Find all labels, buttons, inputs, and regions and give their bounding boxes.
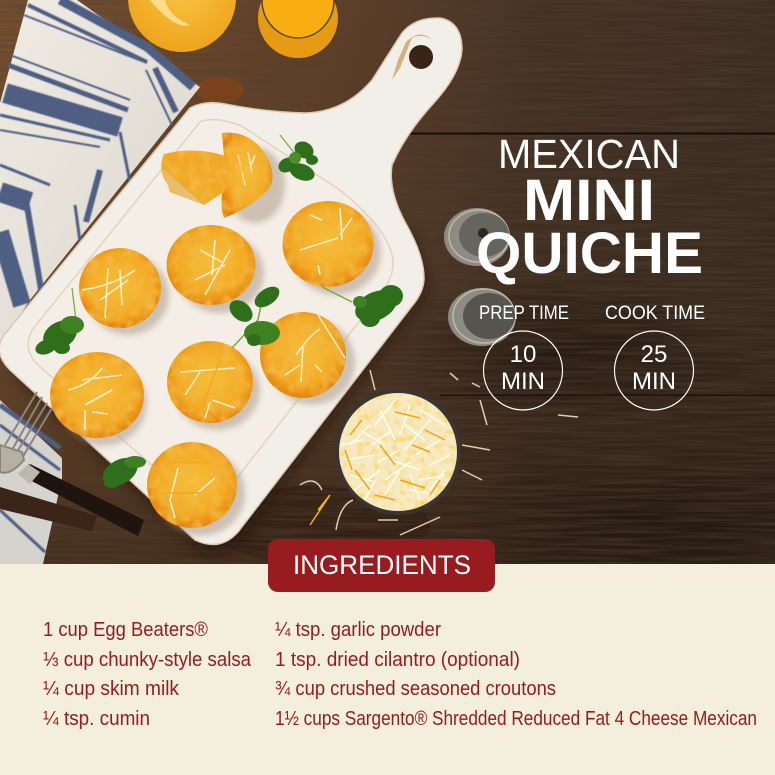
ingredients list: left column: 1 cup Egg Beaters® [43,619,208,641]
dark utensil handle [0,487,97,531]
ingredients list: left column [43,619,252,730]
ingredients panel [0,564,775,775]
title: Mexican Mini Quiche [476,131,703,286]
quiche shadows [59,147,381,536]
glass: right juice [258,0,338,58]
cook time circle [614,331,694,410]
cilantro sprig top [276,135,318,184]
cilantro garnishes [33,135,403,492]
quiche 5 [167,341,253,423]
cilantro sprig left [33,288,84,357]
title line: MINI: MINI [523,168,655,233]
fork [0,392,52,473]
cook time block [605,303,705,410]
cilantro sprig right [322,284,403,328]
ingredients list: left column: ¼ tsp. cumin [43,708,150,730]
cook time circle: MIN [632,368,676,395]
ingredients list: left column: ¼ cup skim milk [43,678,180,700]
ingredients list: right column: 1 tsp. dried cilantro (optional) [275,649,520,671]
juice glasses [128,0,338,58]
cilantro sprig centre [225,282,283,348]
cut quiche [161,133,273,218]
quiche 3 [282,201,374,287]
quiche 6 [260,312,346,398]
ingredients heading badge [268,539,495,592]
quiche 1 [79,248,161,328]
quiche 2 [166,225,256,305]
fork and knife [0,392,144,536]
title line: MEXICAN: MEXICAN [498,131,680,177]
knife bolster [18,464,40,484]
white cutting board [0,18,462,545]
quiches [50,201,374,528]
prep time circle: MIN [501,368,545,395]
prep time circle: 10 [510,341,536,368]
loose cheese shreds [300,370,578,535]
striped napkin [0,0,200,564]
cook time label: COOK TIME [605,303,705,324]
knife handle [18,464,144,536]
board shadow [10,230,430,556]
board inner groove [28,120,393,501]
wood table background [0,0,775,590]
quiche 7 [147,442,237,528]
ingredients list: right column [275,619,757,730]
board handle hole [409,45,433,69]
glass: left juice [128,0,236,52]
ingredients list: left column: ⅓ cup chunky-style salsa [43,649,252,671]
cook time circle: 25 [641,341,667,368]
cilantro sprig bottom [98,452,146,492]
prep time label: PREP TIME [479,303,569,324]
prep time block [479,303,569,410]
salt and pepper shakers [444,208,516,346]
title line: QUICHE: QUICHE [476,221,703,286]
ingredients heading badge: INGREDIENTS [293,550,471,580]
shaker 2 [448,288,516,346]
ingredients list: right column: ¾ cup crushed seasoned croutons [275,678,556,700]
shaker 1 [444,208,510,266]
ingredients list: right column: ¼ tsp. garlic powder [275,619,441,641]
quiche 4 [50,352,144,438]
shredded cheese bowl [335,389,461,515]
prep time circle [484,331,562,410]
